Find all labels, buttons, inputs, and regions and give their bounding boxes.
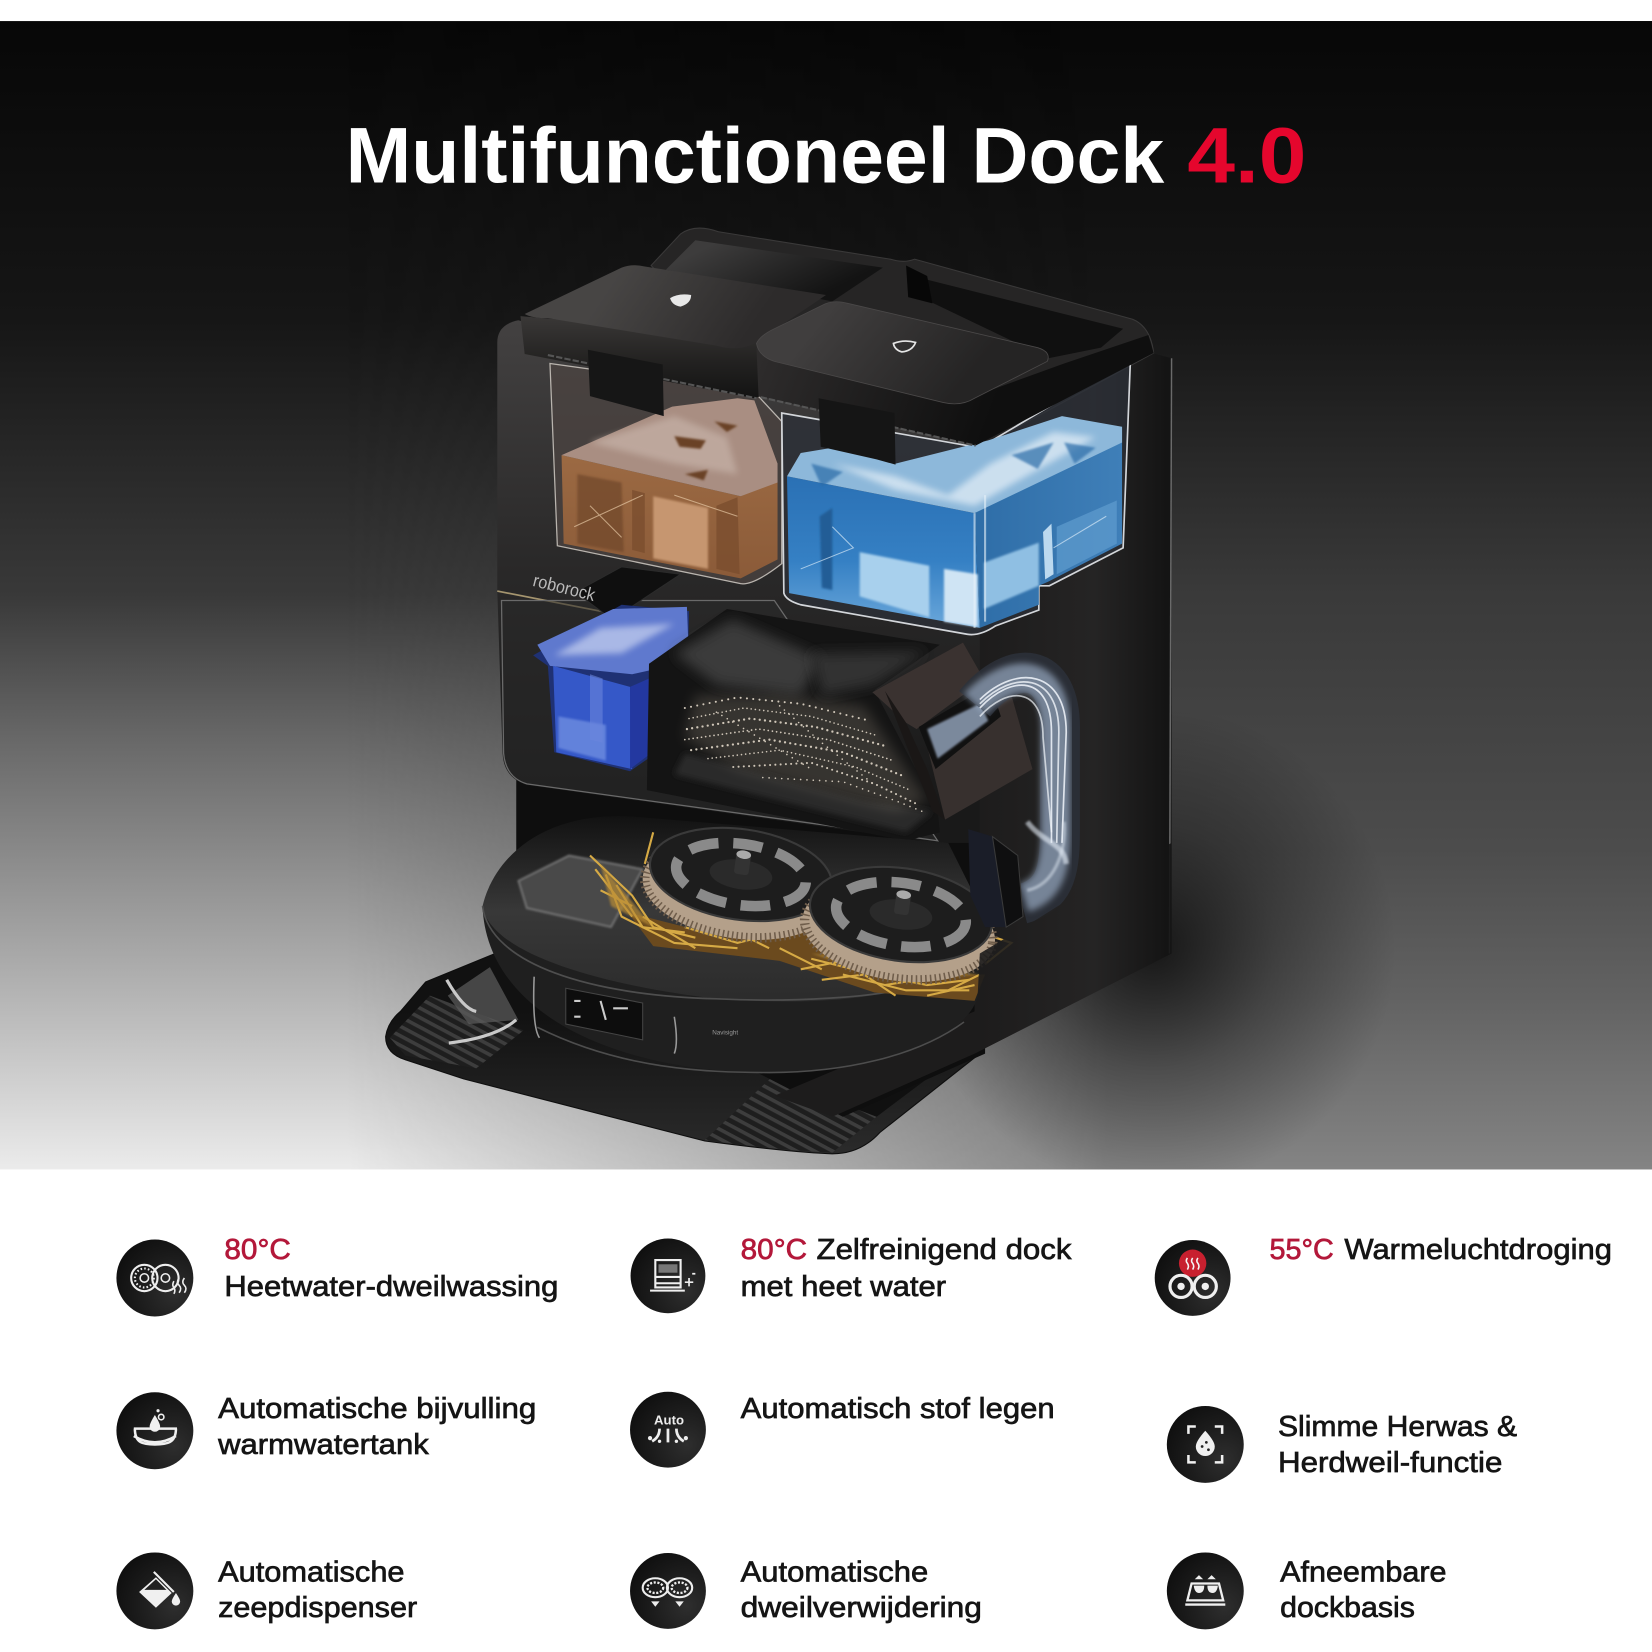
panel: dark hero backdrop	[0, 21, 1652, 1169]
robot body	[483, 906, 980, 1073]
robot top cover	[483, 816, 980, 1001]
lower chamber	[502, 601, 938, 841]
icon: dock with sparkle	[631, 1238, 705, 1313]
text	[741, 1556, 982, 1624]
brown dirty water	[562, 398, 778, 578]
dock illustration	[386, 228, 1172, 1154]
icon: hot air above two pads	[1155, 1240, 1231, 1316]
text: dockbasis	[1280, 1592, 1415, 1624]
dock right face	[774, 348, 1172, 1117]
text: Warmeluchtdroging	[1344, 1234, 1612, 1266]
text: Automatische bijvulling	[218, 1393, 536, 1425]
feature: afneembare dockbasis	[1167, 1552, 1447, 1629]
dock rear cavity	[516, 780, 985, 1117]
text: Automatisch stof legen	[741, 1393, 1055, 1425]
text: Automatische	[741, 1556, 928, 1588]
text	[218, 1556, 417, 1624]
dust outlet box	[872, 643, 1032, 820]
feature: heetwater-dweilwassing	[116, 1234, 558, 1316]
feature: automatisch stof legen	[630, 1392, 1055, 1468]
floor plate	[386, 953, 980, 1154]
features grid	[116, 1234, 1612, 1629]
mop pad 2	[796, 855, 1003, 994]
robot window	[518, 856, 643, 927]
tank clasps	[588, 350, 896, 465]
title: Multifunctioneel Dock	[346, 110, 1165, 199]
dust particles	[685, 697, 927, 813]
blue tank glass	[782, 358, 1130, 635]
icon: two detached pads	[630, 1553, 706, 1629]
feature: slimme herwas	[1167, 1406, 1517, 1483]
robot display panel	[534, 977, 738, 1054]
icon: bowl with drops	[116, 1392, 193, 1469]
icon: tilted soap bucket	[116, 1552, 193, 1629]
title: 4.0	[1187, 110, 1306, 199]
dock lower right front	[975, 843, 1172, 1054]
robot bottom highlight	[537, 1022, 964, 1073]
text: warmwatertank	[217, 1429, 430, 1461]
text: zeepdispenser	[218, 1592, 417, 1624]
mop pad 1	[636, 816, 843, 952]
text: met heet water	[741, 1271, 946, 1303]
dust bag	[647, 609, 940, 841]
robot rim highlight	[483, 906, 896, 1000]
right lid	[756, 302, 1154, 446]
text: 80°C	[741, 1234, 807, 1266]
text: Zelfreinigend dock	[817, 1234, 1072, 1266]
dock edge highlight	[1169, 358, 1172, 953]
air duct	[975, 673, 1066, 904]
text	[1280, 1556, 1447, 1624]
text: dweilverwijdering	[741, 1592, 982, 1624]
text: 55°C	[1270, 1234, 1334, 1266]
icon: scan frame with drop	[1167, 1406, 1244, 1483]
text	[217, 1393, 536, 1461]
small detergent tank	[533, 605, 689, 771]
text: Herdweil-functie	[1278, 1447, 1502, 1479]
left lid	[520, 265, 826, 398]
brown tank glass	[550, 363, 782, 584]
filter flap	[575, 567, 681, 620]
text	[741, 1234, 1072, 1303]
robot display panel: Navisight	[712, 1030, 738, 1037]
text: Automatische	[218, 1556, 405, 1588]
dock docking clamps	[968, 829, 1023, 927]
icon: auto dust emptying	[630, 1392, 706, 1468]
text: Afneembare	[1280, 1556, 1447, 1588]
text: Heetwater-dweilwassing	[224, 1271, 558, 1303]
icon: two mop pads with steam	[116, 1240, 193, 1316]
rear trays	[651, 228, 1154, 448]
robot vacuum	[483, 816, 1011, 1073]
feature: zeepdispenser	[116, 1552, 417, 1629]
logo divider line	[497, 591, 622, 615]
blue clean water	[787, 416, 1122, 628]
text: Slimme Herwas &	[1278, 1411, 1517, 1443]
roborock logo: roborock	[531, 570, 597, 605]
feature: warmeluchtdroging	[1155, 1234, 1612, 1316]
icon: removable base	[1167, 1552, 1244, 1629]
golden splash	[590, 832, 1011, 1001]
dock upper front panel	[497, 320, 980, 843]
icon: auto dust emptying: Auto	[654, 1412, 684, 1427]
text	[1278, 1411, 1517, 1479]
feature: dweilverwijdering	[630, 1553, 982, 1629]
text: 80°C	[224, 1234, 291, 1266]
text	[224, 1234, 558, 1303]
feature: zelfreinigend dock	[631, 1234, 1072, 1313]
feature: automatische bijvulling	[116, 1392, 536, 1469]
